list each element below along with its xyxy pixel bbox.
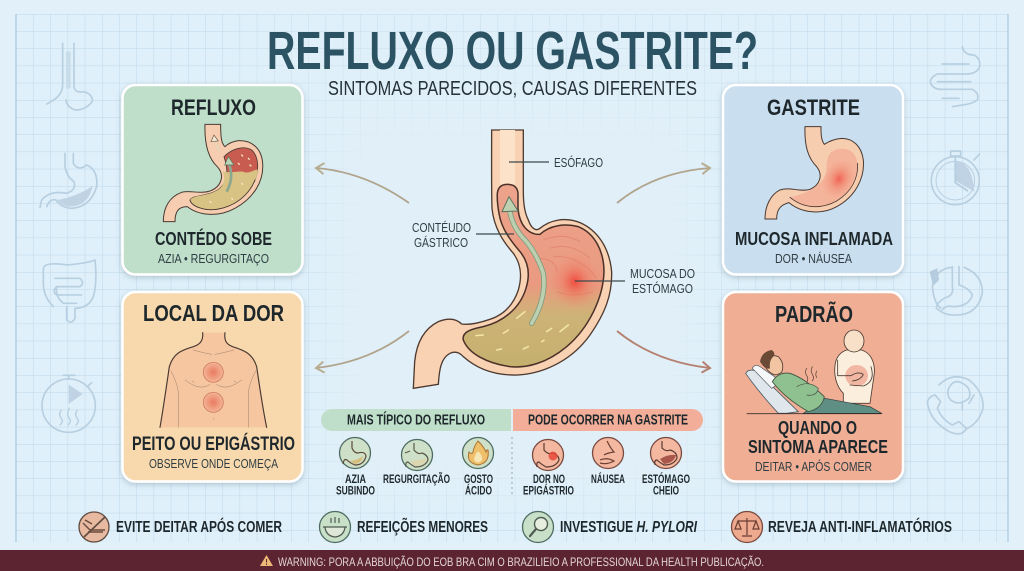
subtext: deitar após comer: DEITAR • APÓS COMER: [755, 459, 872, 474]
item: azia subindo: SUBINDO: [336, 486, 375, 498]
left side decorative icons: [40, 43, 97, 432]
item: dor no epigástrio: DOR NO: [533, 474, 565, 486]
arrow: to gastrite: [617, 168, 710, 203]
item: gosto ácido: GOSTO: [464, 474, 493, 486]
icon: stomach ring: [930, 267, 982, 315]
icon: stopwatch: [931, 151, 980, 205]
item: gosto ácido: [462, 438, 494, 498]
panel: local da dor: [122, 292, 302, 482]
illustration: stomach with rising content: [163, 124, 263, 222]
label: mucosa do estômago: ESTÓMAGO: [632, 281, 693, 296]
title: REFLUXO OU GASTRITE?: [267, 21, 758, 81]
item: estômago cheio: [642, 438, 690, 498]
item: gosto ácido: ÁCIDO: [465, 484, 492, 498]
inner mucosa folds: [537, 236, 597, 295]
tip: evite deitar após comer: [79, 512, 282, 542]
central stomach diagram: [413, 130, 612, 388]
warning text: WARNING: PORA A ABBUIÇÃO DO EOB BRA CIM O BRAZILIEIO A PROFESSIONAL DA HEALTH PUBLICAÇÃO.: [278, 555, 764, 569]
panel: gastrite: [723, 85, 903, 274]
label: esôfago: [509, 155, 603, 170]
icon: phone with stomach: [927, 377, 983, 434]
tip: refeições menores: [320, 512, 488, 542]
subtitle: SINTOMAS PARECIDOS, CAUSAS DIFERENTES: [328, 78, 697, 100]
pill: pode ocorrer na gastrite: [513, 409, 703, 431]
food particles: [476, 312, 568, 350]
heading: local da dor: LOCAL DA DOR: [143, 300, 284, 326]
caption: conteúdo sobe: CONTÉDO SOBE: [155, 228, 272, 249]
panel: refluxo: [122, 85, 302, 274]
tip: reveja anti-inflamatórios: REVEJA ANTI-INFLAMATÓRIOS: [768, 518, 952, 536]
label: mucosa do estômago: MUCOSA DO: [630, 266, 695, 281]
icon: warning triangle: [260, 555, 273, 566]
heading: refluxo: REFLUXO: [171, 95, 256, 120]
label: conteúdo gástrico: GÁSTRICO: [414, 235, 468, 250]
subtext: azia regurgitação: AZIA • REGURGITAÇO: [158, 251, 269, 266]
legend comparison: [321, 409, 703, 498]
pill: pode ocorrer na gastrite: PODE OCORRER NA GASTRITE: [528, 412, 688, 428]
item: azia subindo: AZIA: [345, 474, 366, 486]
item: náusea: NÁUSEA: [591, 473, 625, 486]
illustration: torso with pain points: [160, 333, 267, 427]
icon: esophagus outline: [47, 43, 93, 110]
item: regurgitação: [383, 440, 450, 486]
pill: mais típico do refluxo: MAIS TÍPICO DO REFLUXO: [347, 412, 485, 428]
item: azia subindo: [336, 438, 375, 498]
label: mucosa do estômago: [575, 266, 695, 296]
tip: evite deitar após comer: EVITE DEITAR APÓS COMER: [116, 518, 282, 536]
tip: refeições menores: REFEIÇÕES MENORES: [357, 518, 488, 536]
panel: padrão: [723, 292, 903, 482]
pill: mais típico do refluxo: [321, 409, 511, 431]
label: conteúdo gástrico: [412, 220, 514, 250]
caption: peito ou epigástrio: PEITO OU EPIGÁSTRIO: [132, 433, 295, 455]
tip: investigue h. pylori: INVESTIGUE H. PYLORI: [560, 519, 698, 536]
item: dor no epigástrio: EPIGÁSTRIO: [523, 484, 574, 498]
esophagus highlight: [500, 130, 515, 184]
item: regurgitação: REGURGITAÇÃO: [383, 473, 450, 486]
icon: intestine outline: [43, 260, 96, 322]
arrow: to local da dor: [316, 331, 409, 368]
icon: winding gut tube: [930, 47, 980, 107]
caption: mucosa inflamada: MUCOSA INFLAMADA: [735, 229, 893, 249]
illustration: inflamed stomach: [765, 127, 863, 219]
heading: padrão: PADRÃO: [775, 300, 853, 327]
reflux arrow: [510, 212, 544, 323]
label: esôfago: ESÓFAGO: [554, 155, 603, 170]
heading: gastrite: GASTRITE: [767, 95, 860, 120]
label: conteúdo gástrico: CONTÉUDO: [412, 220, 471, 235]
subtext: observe onde começa: OBSERVE ONDE COMEÇA: [149, 456, 278, 471]
warning footer: [0, 550, 1024, 571]
caption: quando o: QUANDO O: [778, 417, 857, 438]
item: estômago cheio: CHEIO: [653, 486, 679, 498]
inflamed area: [550, 253, 600, 310]
illustration: patient lying and doctor: [746, 330, 882, 414]
item: estômago cheio: ESTÓMAGO: [642, 473, 690, 486]
item: dor no epigástrio: [523, 440, 574, 498]
icon: stomach outline: [40, 153, 97, 208]
arrow: to refluxo: [316, 168, 409, 203]
tip: reveja anti-inflamatórios: [732, 512, 952, 542]
caption: sintoma aparece: SINTOMA APARECE: [748, 436, 888, 457]
right side decorative icons: [927, 47, 983, 434]
arrow: to padrão: [617, 331, 710, 368]
subtext: dor náusea: DOR • NÁUSEA: [775, 251, 852, 266]
icon: timer with steam: [42, 375, 95, 432]
tip: investigue h. pylori: [522, 512, 698, 542]
item: náusea: [591, 438, 625, 486]
mucosa lumen: [463, 184, 604, 367]
stomach wall: [413, 130, 612, 388]
